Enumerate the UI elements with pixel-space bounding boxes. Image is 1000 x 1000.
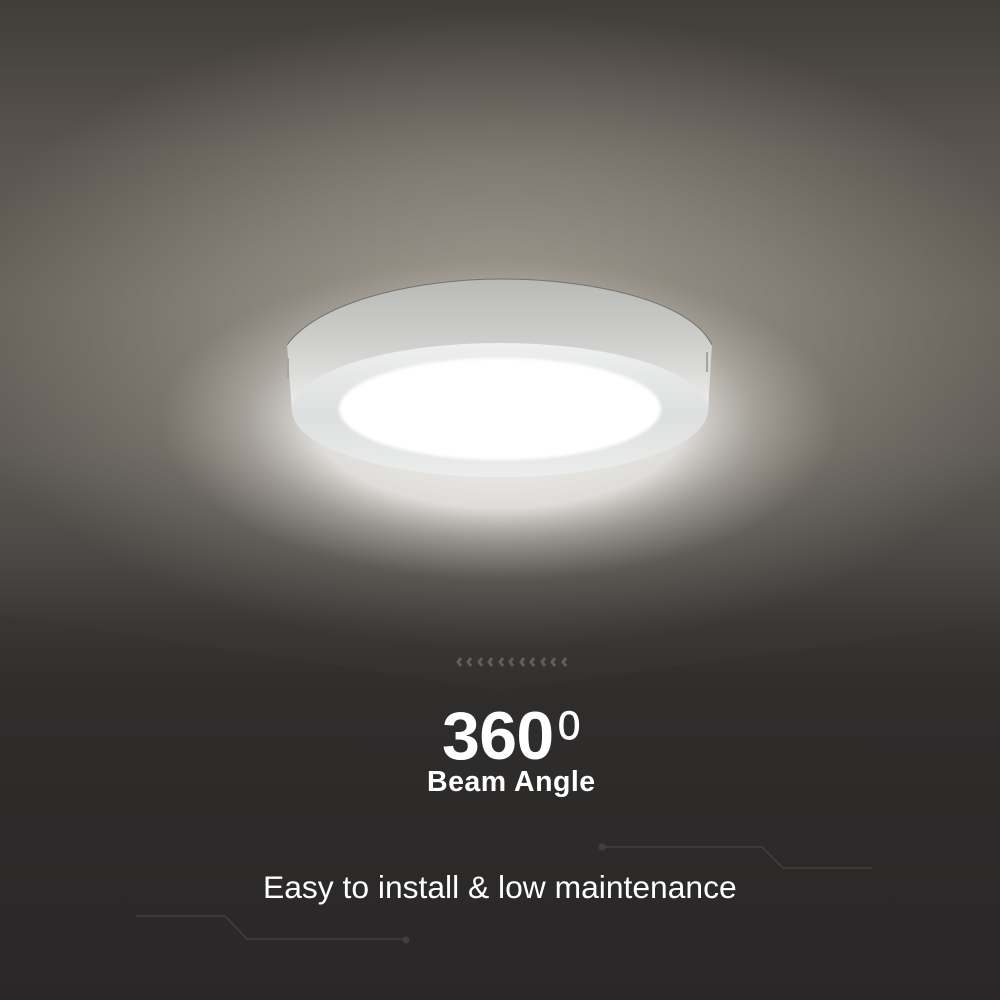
lamp light disc <box>339 358 661 460</box>
heading: 360 degrees: 360 <box>442 698 554 774</box>
subheading: beam angle: Beam Angle <box>427 766 596 798</box>
lamp fixture <box>287 279 712 477</box>
lamp front ring <box>292 343 708 477</box>
degree mark: 0 <box>558 704 580 748</box>
tagline: Easy to install & low maintenance <box>263 869 737 905</box>
lamp side wall <box>287 279 712 477</box>
